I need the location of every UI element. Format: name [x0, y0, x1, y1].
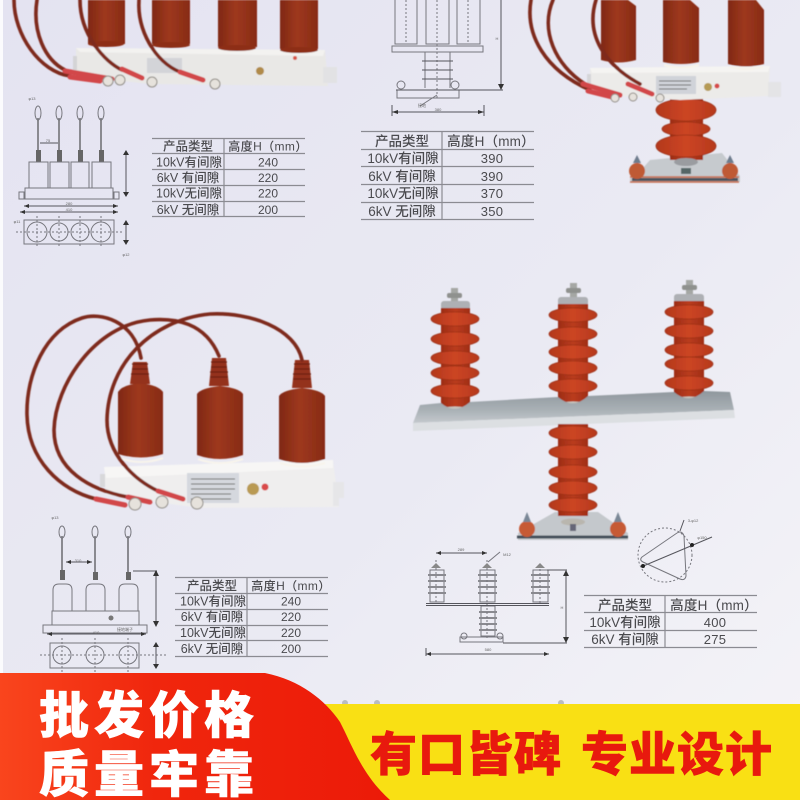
table: four-phase heights: 高度H（mm）: [228, 138, 308, 154]
table: bottom left heights: 10kV无间隙: [180, 626, 246, 640]
table: four-phase heights: 220: [258, 171, 278, 185]
table: bottom right heights: 高度H（mm）: [670, 598, 758, 613]
table: bottom left heights: 6kV 有间隙: [181, 610, 244, 624]
table: bottom right heights: 产品类型: [598, 598, 652, 613]
cross bar: [413, 391, 735, 431]
line drawing: bottom left three-phase dimensions: 310: [75, 558, 82, 563]
banner: yellow strip: [0, 704, 800, 800]
table: bottom left heights: 产品类型: [187, 579, 237, 593]
line drawing: four-phase dimensions: 280: [66, 201, 73, 206]
table: bottom left heights: 220: [281, 626, 301, 640]
line drawing: bottom right T-frame dimensions: 580: [485, 647, 492, 652]
line drawing: bottom right T-frame dimensions: 289: [458, 547, 465, 552]
table: four-phase heights: 10kV无间隙: [156, 186, 222, 200]
table: bottom left heights: 220: [281, 610, 301, 624]
table: four-phase heights: 10kV有间隙: [156, 156, 222, 170]
line drawing: bottom left three-phase dimensions: 接地端子: [117, 626, 133, 632]
line drawing: top centre dimensions: 380: [435, 107, 442, 112]
table: bottom left heights: [175, 577, 331, 656]
peeking bolts above banner: [342, 700, 564, 706]
table: bottom right heights: 10kV有间隙: [589, 615, 661, 630]
line drawing: four-phase dimensions: φ13: [28, 96, 36, 101]
right insulator: [665, 280, 713, 404]
line drawing: bottom right T-frame dimensions: H: [561, 605, 564, 610]
table: four-phase heights: 200: [258, 203, 278, 217]
product photo: arrester on post, top right: [530, 0, 781, 182]
table: top centre heights: 390: [481, 169, 503, 184]
product photo: central T-frame arrester with sheds: [413, 280, 735, 540]
table: top centre heights: 6kV 无间隙: [368, 204, 436, 219]
slogan: wholesale price: 批发价格: [39, 688, 259, 744]
table: four-phase heights: 产品类型: [163, 140, 213, 154]
table: bottom left heights: 200: [281, 642, 301, 656]
centre insulator: [549, 283, 597, 408]
table: bottom left heights: 高度H（mm）: [251, 578, 331, 593]
line drawing: four-phase dimensions: 410: [66, 207, 73, 212]
table: top centre heights: 6kV 有间隙: [368, 169, 436, 184]
line drawing: triangular base plate: [638, 518, 712, 582]
table: four-phase heights: [152, 138, 308, 217]
line drawing: four-phase dimensions: φ12: [122, 252, 130, 257]
left insulator: [431, 288, 479, 414]
line drawing: four-phase dimensions: 75: [46, 138, 51, 143]
table: top centre heights: 10kV无间隙: [367, 186, 439, 201]
lower insulator and base plate: [517, 424, 628, 540]
slogan: word of mouth, professional design: 专业设计: [581, 728, 773, 781]
table: bottom right heights: [584, 595, 758, 648]
table: bottom left heights: 6kV 无间隙: [181, 642, 244, 656]
table: top centre heights: 390: [481, 151, 503, 166]
product photo: left three-phase arrester with cables: [27, 314, 344, 510]
line drawing: bottom left three-phase dimensions: [40, 515, 168, 672]
line drawing: four-phase dimensions: [14, 96, 130, 257]
table: bottom right heights: 275: [704, 632, 726, 647]
product photo: four-phase arrester, top left: [14, 0, 337, 89]
slogan: word of mouth, professional design: [370, 728, 773, 781]
table: bottom left heights: 10kV有间隙: [180, 594, 246, 608]
table: top centre heights: 370: [481, 186, 503, 201]
table: four-phase heights: 6kV 无间隙: [157, 203, 220, 217]
slogan: word of mouth, professional design: 有口皆碑: [370, 728, 562, 781]
table: bottom right heights: 400: [704, 615, 726, 630]
table: four-phase heights: 220: [258, 186, 278, 200]
table: top centre heights: [361, 131, 535, 220]
line drawing: bottom right T-frame dimensions: [426, 547, 569, 656]
table: top centre heights: 350: [481, 204, 503, 219]
table: four-phase heights: 6kV 有间隙: [157, 171, 220, 185]
line drawing: triangular base plate: φ150: [697, 535, 707, 540]
table: top centre heights: 高度H（mm）: [447, 134, 535, 149]
line drawing: bottom left three-phase dimensions: 410: [93, 630, 100, 635]
line drawing: bottom right T-frame dimensions: M12: [503, 552, 512, 557]
line drawing: top centre dimensions: 接地: [418, 102, 426, 108]
banner: red badge: [0, 673, 390, 800]
table: top centre heights: 10kV有间隙: [367, 151, 439, 166]
line drawing: top centre dimensions: [392, 0, 504, 116]
table: bottom left heights: 240: [281, 594, 301, 608]
table: top centre heights: 产品类型: [375, 134, 429, 149]
line drawing: four-phase dimensions: φ11: [14, 219, 21, 224]
line drawing: triangular base plate: 3-φ12: [688, 518, 699, 523]
table: four-phase heights: 240: [258, 156, 278, 170]
line drawing: bottom left three-phase dimensions: φ13: [51, 515, 59, 520]
line drawing: top centre dimensions: H: [496, 36, 499, 41]
table: bottom right heights: 6kV 有间隙: [591, 632, 659, 647]
